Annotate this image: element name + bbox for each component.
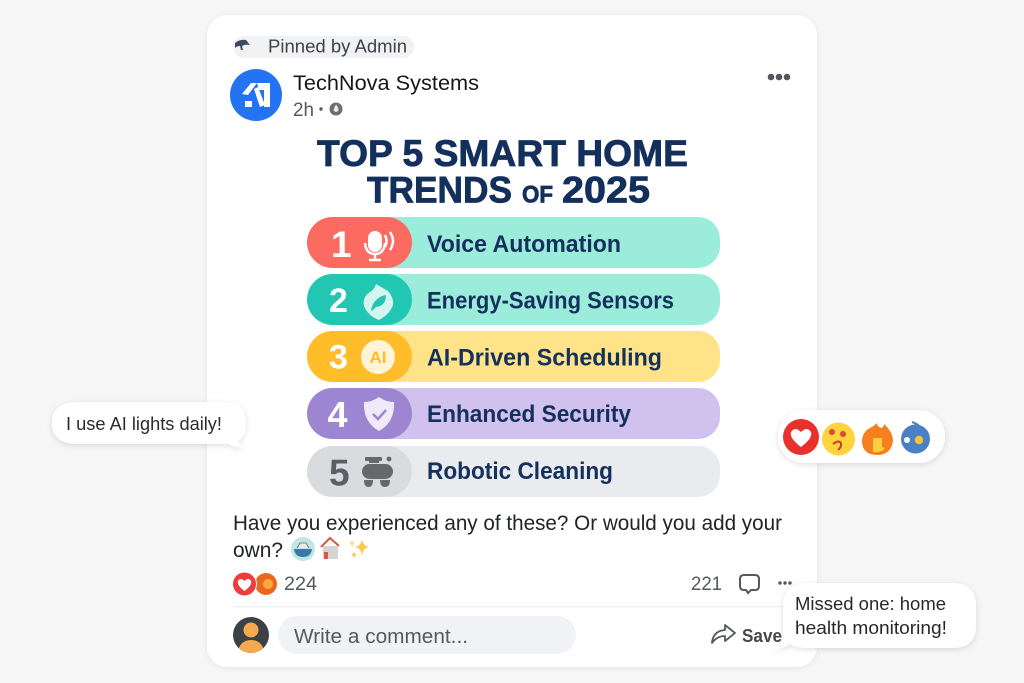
- comment count: 221: [691, 574, 722, 595]
- comment input: Write a comment...: [294, 626, 468, 648]
- icon: TechNova logo: [230, 69, 282, 121]
- icon: heart reaction: [783, 419, 819, 455]
- trend 5: robotic cleaning: 5: [329, 452, 350, 494]
- trend 1: voice automation: 1: [331, 224, 352, 265]
- comment bubble: missed one: [775, 583, 976, 649]
- post meta: [293, 100, 342, 121]
- reaction bubble: [778, 410, 945, 463]
- icon: leaf sensor: [364, 284, 393, 320]
- author name: TechNova Systems: [293, 71, 479, 95]
- trend 2: energy-saving sensors: 2: [329, 282, 348, 320]
- reactions count: [232, 572, 317, 596]
- trend 4: enhanced security: [307, 388, 720, 439]
- title: [317, 132, 688, 210]
- save action: Save: [742, 625, 782, 646]
- trend 4: enhanced security: 4: [328, 394, 348, 435]
- title: TRENDS: [367, 168, 512, 210]
- post caption: own?: [233, 539, 283, 562]
- comment bubble: AI lights: [52, 402, 246, 447]
- icon: AI badge: AI: [370, 348, 386, 367]
- icon: shield: [364, 397, 394, 431]
- trend 3: ai-driven scheduling: AI-Driven Scheduling: [427, 344, 662, 372]
- trend 5: robotic cleaning: Robotic Cleaning: [427, 458, 613, 485]
- title: OF: [522, 182, 553, 208]
- trend 5: robotic cleaning: [307, 446, 720, 497]
- icon: AI badge: [361, 340, 395, 374]
- comment bubble: missed one: health monitoring!: [795, 618, 947, 638]
- post meta: 2h: [293, 100, 314, 121]
- comment bubble: AI lights: I use AI lights daily!: [66, 413, 222, 434]
- comment count: [691, 574, 792, 595]
- trend 1: voice automation: Voice Automation: [427, 231, 621, 258]
- trend 3: ai-driven scheduling: [307, 331, 720, 382]
- title: 2025: [562, 168, 650, 210]
- post caption: Have you experienced any of these? Or would you add your: [233, 512, 782, 535]
- panel: post card: [207, 15, 817, 667]
- title: TOP 5 SMART HOME: [317, 132, 688, 174]
- comment input: [278, 616, 576, 654]
- icon: fire: [862, 423, 893, 455]
- trend 3: ai-driven scheduling: 3: [329, 338, 348, 376]
- trend 2: energy-saving sensors: [307, 274, 720, 325]
- trend 1: voice automation: [307, 217, 720, 268]
- pinned badge: Pinned by Admin: [268, 36, 407, 56]
- icon: robot vacuum: [362, 457, 393, 487]
- icon: caption emojis: [291, 537, 369, 561]
- post caption: [233, 512, 782, 562]
- icon: blue emoji: [901, 422, 930, 454]
- icon: user avatar: [233, 617, 269, 655]
- pinned badge: [233, 36, 414, 58]
- trend 4: enhanced security: Enhanced Security: [427, 401, 632, 428]
- icon: microphone: [365, 231, 393, 260]
- reactions count: 224: [284, 574, 317, 595]
- trend 2: energy-saving sensors: Energy-Saving Sensors: [427, 288, 674, 314]
- icon: thinking face: [822, 422, 855, 456]
- icon: more options: [768, 74, 790, 80]
- comment bubble: missed one: Missed one: home: [795, 594, 946, 614]
- save action: [712, 625, 782, 646]
